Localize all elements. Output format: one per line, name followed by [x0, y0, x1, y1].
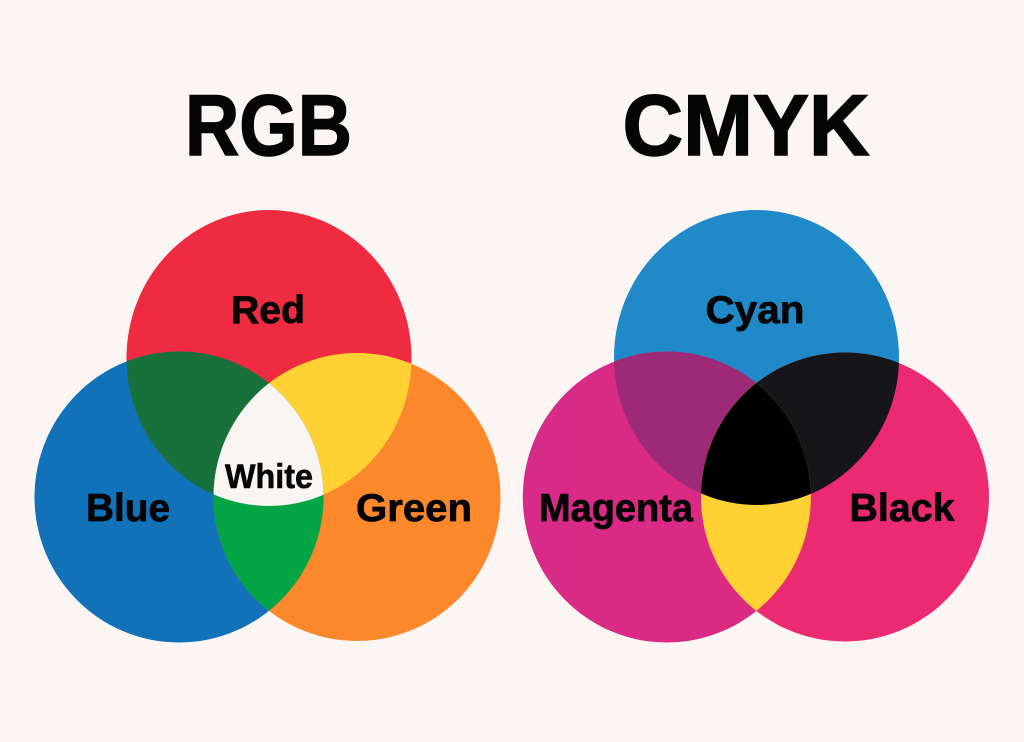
label: Green: Green [356, 487, 472, 530]
overlap: Red and Green [214, 353, 412, 495]
circle: Cyan [614, 210, 899, 505]
label: Red: Red [231, 289, 305, 332]
title: RGB: RGB [185, 78, 352, 174]
label: White: White [225, 458, 313, 496]
overlap: Magenta and Black [701, 383, 811, 611]
label: Black: Black [850, 487, 955, 530]
circle: Magenta [523, 352, 811, 642]
label: Blue: Blue [86, 487, 170, 530]
label: Cyan: Cyan [706, 289, 804, 332]
circle: Green (orange fill) [214, 353, 500, 641]
overlap: Red and Blue [126, 352, 269, 494]
circle: Black (pink fill) [701, 352, 989, 642]
label: Magenta: Magenta [539, 487, 693, 530]
overlap: White centre [214, 383, 324, 506]
diagram: CMYK venn [523, 210, 989, 642]
overlap: black centre [701, 383, 811, 505]
diagram: RGB venn [34, 210, 500, 642]
overlap: Blue and Green [214, 383, 324, 611]
overlap: Cyan and Magenta [614, 352, 756, 494]
circle: Red [126, 210, 412, 506]
overlap: Cyan and Black [701, 352, 899, 494]
title: CMYK: CMYK [622, 78, 870, 174]
circle: Blue [34, 352, 324, 642]
